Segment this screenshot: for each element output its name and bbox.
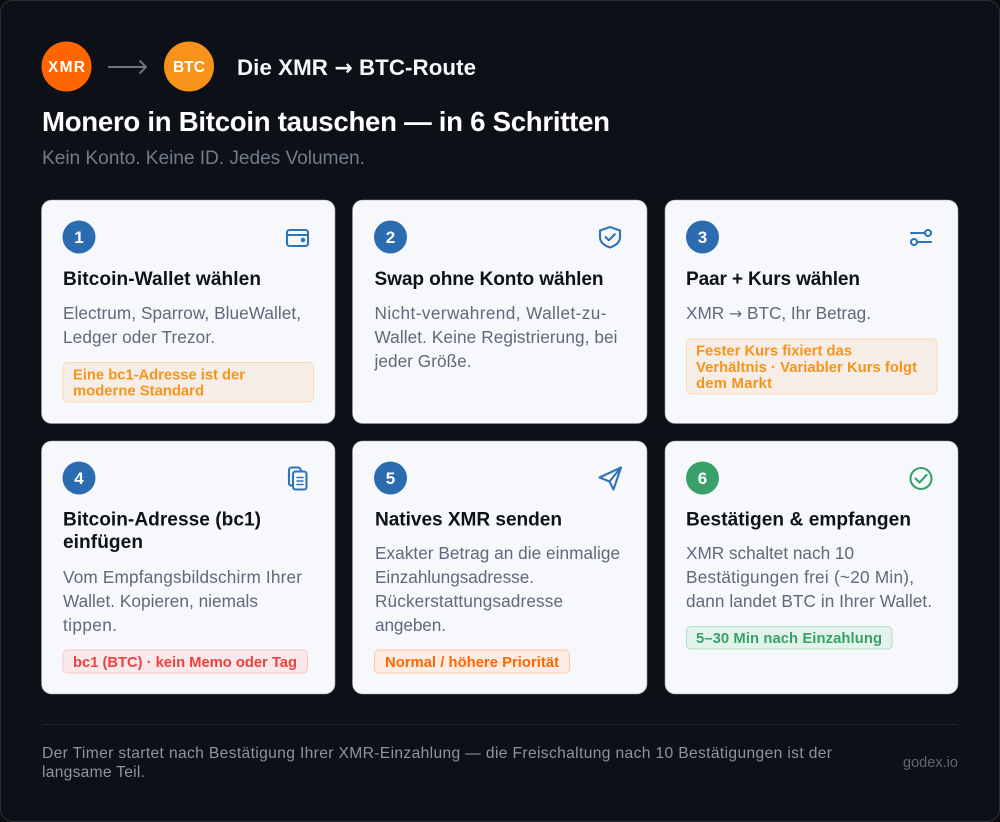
step number 1 [62, 220, 96, 254]
step number 5 [374, 462, 407, 494]
arrow: XMR to BTC [108, 60, 146, 74]
step 2 description: Nicht-verwahrend, Wallet-zu- [374, 303, 606, 323]
step number 6: 6 [698, 469, 707, 488]
step 4 heading: einfügen [63, 532, 143, 553]
icon: copy documents [289, 468, 306, 490]
subtitle: Kein Konto. Keine ID. Jedes Volumen. [42, 148, 365, 169]
panel: step 1 [42, 200, 335, 424]
icon: sliders [911, 230, 931, 245]
panel: step 4 [42, 441, 335, 694]
step 5 description: angeben. [375, 615, 446, 635]
icon: paper plane [600, 468, 621, 490]
step 2 heading: Swap ohne Konto wählen [374, 269, 604, 290]
footnote: langsame Teil. [42, 764, 145, 781]
step number 3: 3 [698, 228, 707, 247]
step 3 tag: Verhältnis · Variabler Kurs folgt [696, 360, 917, 376]
icon: BTC coin: BTC [173, 59, 205, 76]
step 4 tag [63, 650, 308, 673]
panel: step 2 [352, 200, 647, 424]
step 6 description [686, 543, 932, 611]
step 4 tag: bc1 (BTC) · kein Memo oder Tag [73, 655, 297, 671]
panel: step 3 [665, 200, 958, 424]
step 6 tag [686, 626, 892, 649]
route label: Die XMR → BTC-Route [237, 55, 476, 81]
step 3 heading: Paar + Kurs wählen [686, 269, 860, 290]
step 3 tag: dem Markt [696, 376, 772, 392]
icon: XMR coin [42, 42, 92, 92]
step number 4: 4 [74, 469, 84, 488]
step number 3 [686, 220, 719, 254]
step number 6 [686, 462, 719, 494]
step 1 heading: Bitcoin-Wallet wählen [63, 269, 261, 290]
step 2 description: Wallet. Keine Registrierung, bei [374, 327, 618, 347]
step 1 tag: Eine bc1-Adresse ist der [73, 368, 245, 384]
step number 5: 5 [386, 469, 395, 488]
panel: step 6 [665, 441, 958, 694]
step 5 description: Exakter Betrag an die einmalige [375, 543, 620, 563]
brand credit: godex.io [903, 755, 958, 771]
icon: XMR coin: XMR [48, 59, 85, 76]
step 4 description: Wallet. Kopieren, niemals [63, 591, 258, 611]
title: Monero in Bitcoin tauschen — in 6 Schritten [42, 106, 610, 137]
header route row [42, 42, 476, 92]
step 6 description: dann landet BTC in Ihrer Wallet. [686, 591, 932, 611]
step 1 tag [63, 362, 314, 402]
step 6 tag: 5–30 Min nach Einzahlung [696, 631, 882, 647]
icon: check circle [910, 468, 932, 489]
step number 4 [62, 462, 96, 494]
step 3 tag [686, 339, 937, 394]
step 4 description: Vom Empfangsbildschirm Ihrer [63, 567, 302, 587]
step 5 tag [374, 650, 570, 673]
step 6 description: Bestätigungen frei (~20 Min), [686, 567, 914, 587]
step 5 tag: Normal / höhere Priorität [385, 655, 559, 671]
step 6 heading: Bestätigen & empfangen [686, 510, 911, 530]
icon: BTC coin [164, 42, 214, 92]
panel: step 5 [352, 441, 647, 694]
step 1 description: Ledger oder Trezor. [63, 327, 215, 347]
step 5 heading: Natives XMR senden [375, 510, 562, 530]
step 4 heading: Bitcoin-Adresse (bc1) [63, 510, 261, 530]
step number 1: 1 [74, 228, 84, 247]
footnote: Der Timer startet nach Bestätigung Ihrer XMR-Einzahlung — die Freischaltung nach 10 Bestätigungen ist der [42, 745, 832, 762]
step 1 description [63, 303, 301, 347]
step 1 tag: moderne Standard [73, 384, 204, 400]
step 1 description: Electrum, Sparrow, BlueWallet, [63, 303, 301, 323]
step number 2: 2 [386, 228, 395, 247]
step 5 description: Rückerstattungsadresse [375, 591, 563, 611]
step number 2 [374, 220, 407, 254]
step 2 description [374, 303, 618, 371]
step 5 description [375, 543, 620, 635]
step 2 description: jeder Größe. [374, 351, 472, 371]
step 3 description: XMR → BTC, Ihr Betrag. [686, 303, 871, 323]
step 5 description: Einzahlungsadresse. [375, 567, 534, 587]
step 4 description [63, 567, 302, 635]
step 4 description: tippen. [63, 615, 117, 635]
step 3 tag: Fester Kurs fixiert das [696, 344, 852, 360]
step 6 description: XMR schaltet nach 10 [686, 543, 854, 563]
icon: shield check [600, 227, 620, 248]
footnote [42, 745, 832, 781]
step 4 heading [63, 510, 261, 553]
icon: wallet [287, 230, 308, 246]
